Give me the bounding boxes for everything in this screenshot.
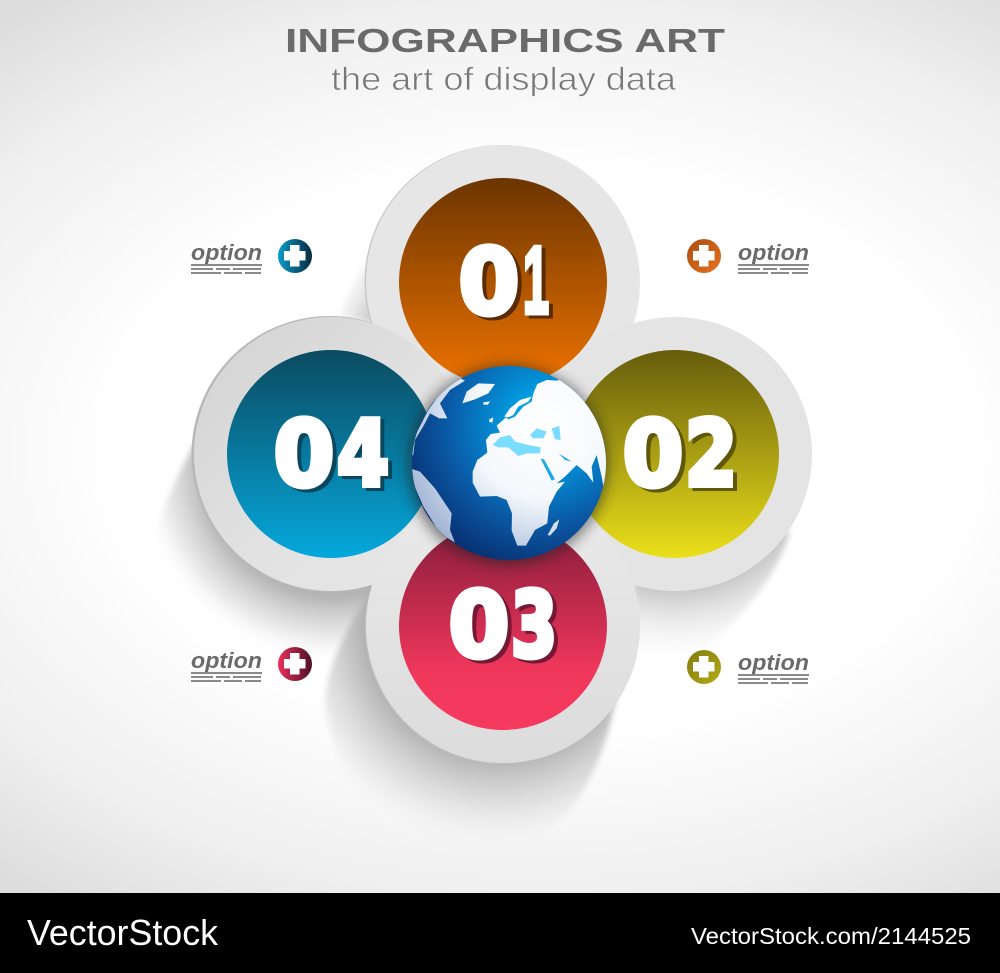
circle 01 xyxy=(399,178,607,386)
footer id: VectorStock.com/2144525 xyxy=(691,923,971,949)
circle 01: 0 xyxy=(459,230,519,335)
Africa and Eurasia xyxy=(473,378,610,546)
option: top right: option xyxy=(738,240,809,265)
option: top left: option xyxy=(191,240,262,265)
circle 02: 0 xyxy=(623,402,683,507)
circle 03: 3 xyxy=(511,573,557,678)
grey paper panel xyxy=(192,145,812,764)
circle 04: 4 xyxy=(337,402,389,507)
circle 01: 0 xyxy=(463,233,523,338)
long shadows xyxy=(152,262,790,858)
title: INFOGRAPHICS ART xyxy=(285,22,725,59)
circle 02: 0 xyxy=(627,405,687,510)
circle 04: 0 xyxy=(278,405,338,510)
circle 02 xyxy=(571,350,779,558)
circle 04 xyxy=(227,350,435,558)
South America xyxy=(410,468,455,543)
icon: plus blue xyxy=(278,239,312,273)
circle 03: 0 xyxy=(449,573,509,678)
icon: plus olive xyxy=(687,650,721,684)
subtitle: the art of display data xyxy=(331,61,676,97)
circle 02: 2 xyxy=(685,402,737,507)
icon: globe xyxy=(407,364,610,566)
footer band xyxy=(0,893,1000,973)
Madagascar xyxy=(548,519,559,536)
circle 04: 0 xyxy=(274,402,334,507)
circle 04: 4 xyxy=(341,405,393,510)
circle 01: 1 xyxy=(527,230,553,337)
circle 01: 1 xyxy=(523,227,549,334)
Britain and Iceland xyxy=(483,401,493,423)
footer brand: VectorStock xyxy=(27,912,219,953)
circle 03: 3 xyxy=(515,576,561,681)
option: bottom right: option xyxy=(738,650,809,675)
circle 03: 0 xyxy=(453,576,513,681)
seas on the globe xyxy=(493,426,572,481)
circle 02: 2 xyxy=(689,405,741,510)
icon: plus red xyxy=(278,647,312,681)
Scandinavia xyxy=(504,397,532,417)
circle 03 xyxy=(399,522,607,730)
Greenland xyxy=(462,383,495,403)
North America xyxy=(410,377,465,457)
diagram: four-circle panel xyxy=(192,145,812,764)
option: bottom left: option xyxy=(191,648,262,673)
icon: plus orange xyxy=(687,239,721,273)
